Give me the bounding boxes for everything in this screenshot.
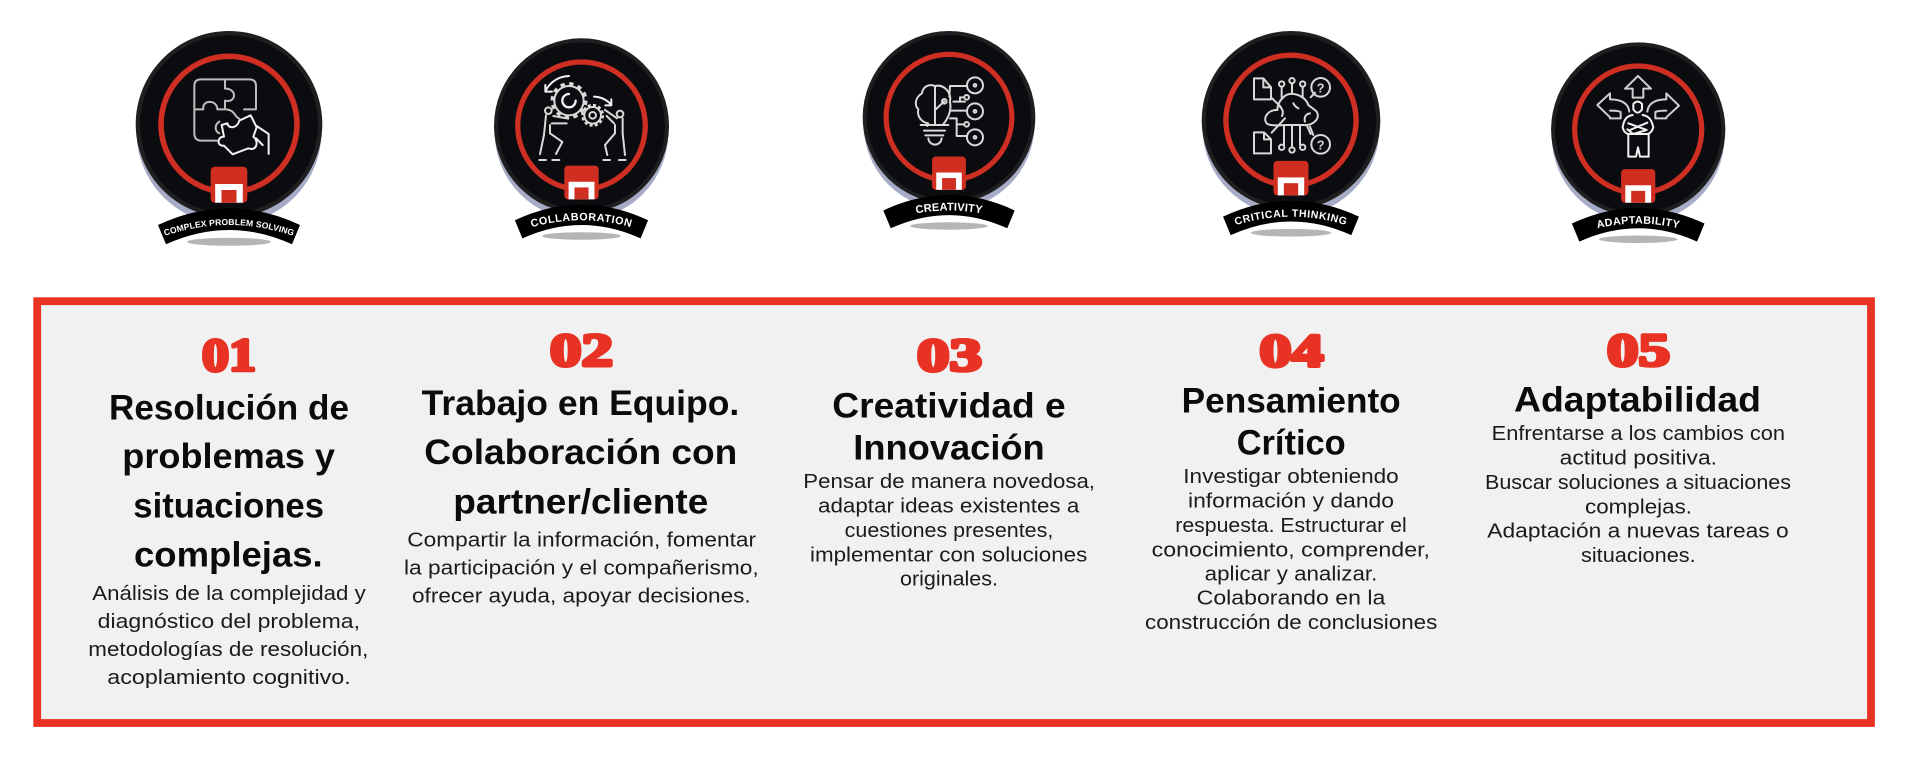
- heading 1: problemas y: [122, 437, 336, 476]
- badge label: complex problem solving: COMPLEX PROBLEM SOLVING: [164, 219, 294, 236]
- number 03: 03: [917, 330, 982, 382]
- panel: competencias: [37, 301, 1871, 723]
- heading 3: Innovación: [853, 429, 1045, 468]
- body 4: Colaborando en la: [1197, 588, 1386, 610]
- body 5: complejas.: [1585, 496, 1692, 518]
- number 05: 05: [1607, 324, 1670, 376]
- body 5: Adaptación a nuevas tareas o: [1487, 520, 1789, 542]
- body 5: Enfrentarse a los cambios con: [1492, 423, 1785, 445]
- body 1: metodologías de resolución,: [88, 639, 368, 661]
- heading 1: situaciones: [133, 487, 324, 526]
- icon: people turning gears: [539, 76, 626, 160]
- badge label: adaptability: ADAPTABILITY: [1598, 216, 1680, 228]
- column 2: trabajo en equipo: [404, 324, 759, 608]
- body 1: Análisis de la complejidad y: [92, 583, 366, 605]
- badge: creativity: [862, 31, 1036, 230]
- body 4: [1145, 466, 1437, 634]
- column 1: resolución de problemas: [88, 330, 368, 689]
- body 5: Buscar soluciones a situaciones: [1485, 472, 1791, 494]
- body 4: conocimiento, comprender,: [1152, 539, 1430, 561]
- icon: brain with documents and questions: ?: [1317, 81, 1325, 95]
- heading 2: partner/cliente: [453, 482, 708, 521]
- body 5: situaciones.: [1581, 545, 1696, 567]
- heading 4: Pensamiento: [1182, 382, 1401, 421]
- column 5: adaptabilidad: [1485, 324, 1791, 567]
- column 3: creatividad e innovación: [803, 330, 1095, 590]
- body 2: [404, 530, 759, 608]
- body 4: construcción de conclusiones: [1145, 612, 1437, 634]
- icon: person with three arrows: [1597, 76, 1679, 157]
- body 4: información y dando: [1188, 491, 1394, 513]
- heading 2: Trabajo en Equipo.: [422, 384, 739, 423]
- number 02: 02: [550, 324, 613, 376]
- body 3: [803, 471, 1095, 590]
- body 2: la participación y el compañerismo,: [404, 558, 759, 580]
- icon: brain light bulb with nodes: [916, 77, 983, 145]
- heading 1: Resolución de: [109, 388, 349, 427]
- number 04: 04: [1260, 325, 1324, 377]
- body 4: aplicar y analizar.: [1205, 563, 1377, 585]
- badge: complex problem solving: [136, 31, 322, 246]
- heading 3: [832, 387, 1066, 468]
- body 2: ofrecer ayuda, apoyar decisiones.: [412, 586, 751, 608]
- heading 4: [1182, 382, 1401, 462]
- body 5: actitud positiva.: [1560, 448, 1717, 470]
- badge: collaboration: [494, 38, 669, 240]
- heading 1: [109, 388, 349, 574]
- badge label: creativity: CREATIVITY: [916, 202, 983, 213]
- icon: brain with documents and questions: ?: [1317, 138, 1325, 152]
- number 01: 01: [202, 330, 256, 382]
- body 5: [1485, 423, 1791, 567]
- body 1: [88, 583, 368, 689]
- heading 2: Colaboración con: [424, 433, 737, 472]
- column 4: pensamiento crítico: [1145, 325, 1437, 634]
- badge: adaptability: [1551, 42, 1726, 243]
- body 3: adaptar ideas existentes a: [818, 495, 1080, 517]
- heading 3: Creatividad e: [832, 387, 1066, 426]
- body 1: acoplamiento cognitivo.: [107, 667, 351, 689]
- heading 2: [422, 384, 739, 521]
- icon: puzzle and hand: [194, 79, 269, 154]
- icon: brain with documents and questions: [1254, 78, 1330, 154]
- body 3: implementar con soluciones: [810, 544, 1087, 566]
- heading 1: complejas.: [134, 536, 323, 574]
- body 4: respuesta. Estructurar el: [1175, 515, 1407, 537]
- body 3: Pensar de manera novedosa,: [803, 471, 1095, 493]
- heading 5: Adaptabilidad: [1514, 381, 1761, 420]
- body 3: cuestiones presentes,: [845, 520, 1053, 542]
- body 4: Investigar obteniendo: [1183, 466, 1399, 488]
- heading 4: Crítico: [1237, 423, 1346, 462]
- badge: critical thinking: [1202, 31, 1380, 237]
- body 1: diagnóstico del problema,: [98, 611, 360, 633]
- badge label: collaboration: COLLABORATION: [530, 212, 632, 227]
- body 3: originales.: [900, 568, 998, 590]
- badge label: critical thinking: CRITICAL THINKING: [1234, 209, 1346, 224]
- body 2: Compartir la información, fomentar: [407, 530, 756, 552]
